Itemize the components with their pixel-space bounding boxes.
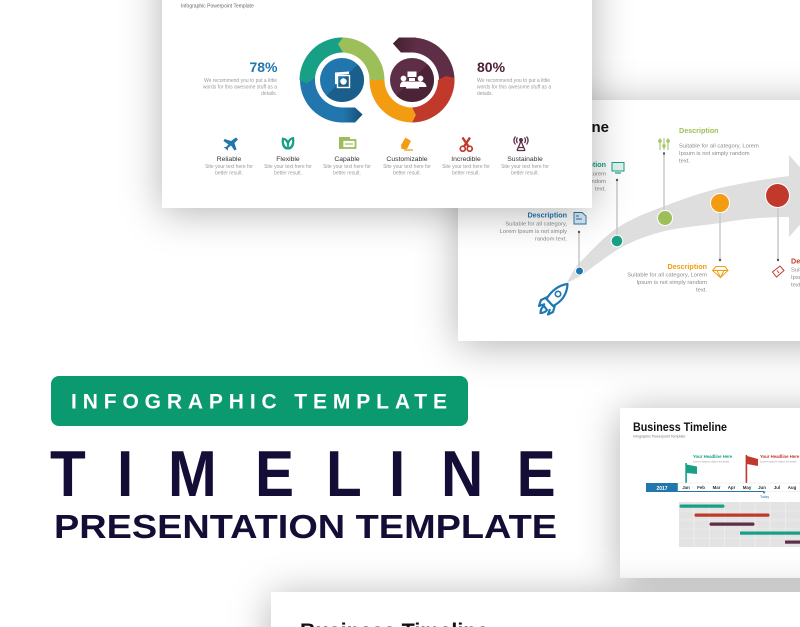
text: teal description: Ipsum is not simply random [535, 179, 606, 185]
stat: 80 percent: details. [477, 91, 493, 97]
feature: reliable: better result. [215, 170, 243, 176]
icon: monitors [339, 137, 356, 149]
circle: blue hub [320, 58, 364, 102]
text: orange description [627, 262, 707, 294]
text: green description: text. [679, 158, 690, 164]
feature: sustainable: Site your text here for [501, 164, 549, 170]
feature: incredible: Site your text here for [442, 164, 490, 170]
feature: flexible: Flexible [276, 156, 300, 163]
flag: teal milestone: Your Headline Here [693, 454, 733, 459]
flag: teal milestone [685, 454, 733, 483]
text: green description: Ipsum is not simply random [679, 151, 750, 157]
timeline markers [576, 184, 790, 275]
text: blue description: random text. [535, 236, 567, 242]
text: green description: Suitable for all category, Lorem [679, 144, 759, 150]
icon: sliders [659, 138, 669, 150]
segment: blue [300, 76, 362, 122]
year and month header: 2017 [656, 486, 668, 492]
feature: capable: Capable [334, 156, 360, 163]
year and month header: Feb [697, 485, 705, 490]
year and month header: Jun [758, 485, 766, 490]
feature: flexible: Site your text here for [264, 164, 312, 170]
stat: 80 percent: 80% [477, 59, 506, 75]
feature: sustainable [501, 136, 549, 176]
feature: sustainable: better result. [511, 170, 539, 176]
text: orange description: text. [696, 288, 707, 294]
feature: sustainable: Sustainable [507, 156, 543, 163]
year and month header: Apr [728, 485, 736, 490]
stat: 80 percent: words for this awesome stuff as a [477, 84, 551, 90]
infinity diagram [300, 37, 455, 123]
flag: red milestone [746, 454, 800, 483]
panel: infinity slide [162, 0, 592, 208]
icon: document [574, 212, 586, 224]
text: blue description: Suitable for all category, [505, 222, 567, 228]
icon: ticket [772, 266, 784, 277]
feature: reliable [205, 138, 253, 176]
text: orange description: Suitable for all category, Lorem [627, 272, 707, 278]
gantt slide title [633, 420, 727, 438]
infinity slide subtitle: Infographic Powerpoint Template [181, 4, 254, 10]
text: blue description: Description [527, 210, 567, 220]
stat: 78 percent: 78% [249, 59, 278, 75]
year and month header: Today [760, 495, 769, 499]
icon: radio tower [514, 136, 528, 150]
feature: customizable: Site your text here for [383, 164, 431, 170]
title: timeline: TIMELINE [50, 438, 556, 511]
segment: orange [370, 80, 416, 122]
icon: airplane [224, 138, 238, 150]
feature: incredible [442, 138, 490, 176]
icon: rocket [539, 284, 568, 314]
gantt chart [679, 502, 800, 547]
icon: pen tool [401, 138, 411, 149]
circle: plum hub [390, 58, 434, 102]
segment: blue shaded tail [343, 108, 362, 122]
text: red description [791, 256, 800, 288]
segment: light green [338, 38, 384, 80]
text: blue description: Lorem Ipsum is not simply [500, 229, 567, 235]
connector stems [579, 153, 778, 271]
text: green description [679, 126, 759, 164]
text: teal description [526, 160, 606, 192]
text: orange description: Ipsum is not simply random [636, 280, 707, 286]
feature: capable [323, 137, 371, 176]
year and month header: May [743, 485, 752, 490]
text: green description: Description [679, 126, 719, 135]
icon: scissors [460, 138, 472, 151]
year and month header [646, 483, 800, 499]
feature: incredible: Incredible [451, 156, 481, 163]
flag: red milestone: Your Headline Here [760, 454, 800, 459]
flag: red milestone: Lorem ipsum dolor sit amet. [760, 460, 797, 464]
feature: customizable [383, 138, 431, 176]
year and month header: Mar [713, 485, 721, 490]
stat: 78 percent [203, 59, 278, 97]
panel: business timeline gantt slide [620, 408, 800, 578]
year and month header: Jan [682, 485, 690, 490]
stem end dots [578, 152, 779, 261]
flag: teal milestone: Lorem ipsum dolor sit amet. [693, 460, 730, 464]
feature: reliable: Reliable [217, 156, 241, 163]
icon: diamond [712, 266, 728, 278]
panel: bottom business timeline slide [271, 592, 800, 627]
feature: flexible: better result. [274, 170, 302, 176]
gantt slide title: Infographic Powerpoint Template [633, 434, 685, 438]
curved growth arrow [567, 155, 800, 283]
text: orange description: Description [667, 262, 707, 271]
stat: 80 percent: We recommend you to put a little [477, 78, 550, 84]
segment: plum shaded tail [393, 38, 416, 52]
feature: flexible [264, 137, 312, 176]
subtitle: presentation template: PRESENTATION TEMPLATE [54, 508, 557, 545]
text: blue description [500, 210, 567, 242]
text: teal description: Description [566, 160, 606, 169]
feature: capable: Site your text here for [323, 164, 371, 170]
feature: customizable: better result. [393, 170, 421, 176]
segment: red [412, 76, 455, 123]
stat: 80 percent [477, 59, 551, 97]
feature: customizable: Customizable [386, 156, 428, 163]
feature: capable: better result. [333, 170, 361, 176]
feature: reliable: Site your text here for [205, 164, 253, 170]
year and month header: Aug [788, 485, 797, 490]
rocket slide title: Timeline [548, 119, 609, 136]
text: teal description: Suitable for all category, Lorem [526, 172, 606, 178]
icon: monitor [612, 162, 624, 173]
segment: plum [393, 38, 454, 80]
stat: 78 percent: We recommend you to put a little [204, 78, 277, 84]
year and month header: Jul [774, 485, 780, 490]
badge: infographic template: INFOGRAPHIC TEMPLATE [71, 390, 447, 414]
stat: 78 percent: details. [261, 91, 277, 97]
gantt slide title: Business Timeline [633, 420, 727, 434]
text: teal description: text. [595, 186, 606, 192]
badge: infographic template [51, 376, 468, 426]
stat: 78 percent: words for this awesome stuff as a [203, 84, 277, 90]
panel: rocket timeline slide [458, 100, 800, 341]
segment: teal [300, 37, 343, 84]
feature: incredible: better result. [452, 170, 480, 176]
icon: leaf [282, 137, 294, 150]
